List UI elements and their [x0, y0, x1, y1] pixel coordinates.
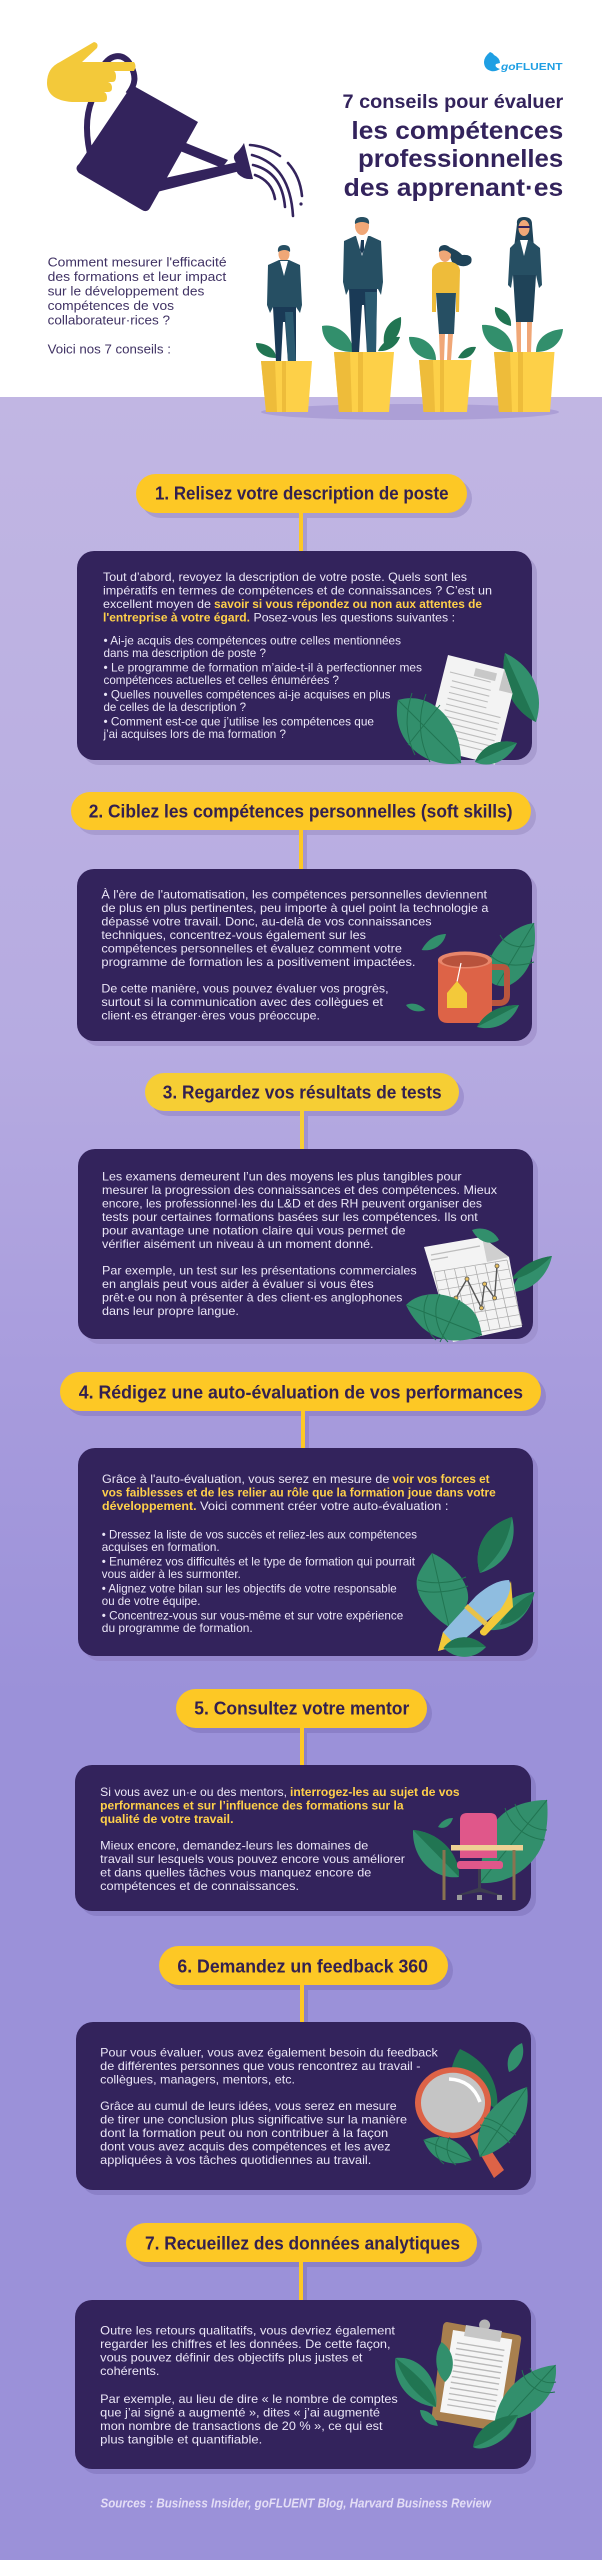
intro text: sur le développement des [48, 284, 205, 298]
step 4 [60, 1372, 546, 1661]
text card: encore, les professionnel·les du L&D et des RH peuvent organiser des [102, 1196, 482, 1210]
pots [261, 352, 554, 412]
text card: et dans quelles tâches vous manquez encore de [100, 1866, 372, 1880]
text card: • Quelles nouvelles compétences ai-je acquises en plus [104, 688, 390, 702]
text card: Mieux encore, demandez-leurs les domaines de [100, 1838, 369, 1852]
text card: dont la formation peut ou non contribuer à la façon [100, 2126, 388, 2140]
intro text: compétences de vos [48, 298, 175, 313]
text card: vous pouvez définir des objectifs plus justes et [100, 2350, 363, 2364]
text card: • Comment est-ce que j’utilise les compétences que [104, 714, 374, 728]
text card: plus tangible et quantifiable. [100, 2432, 262, 2446]
heading pill: 6. Demandez un feedback 360 [177, 1956, 428, 1976]
text card: mon nombre de transactions de 20 % », ce qui est [100, 2419, 383, 2433]
heading pill: 7. Recueillez des données analytiques [145, 2232, 460, 2254]
text card: impératifs en termes de compétences et de connaissances ? C’est un [103, 584, 492, 598]
text card: compétences actuelles et celles énumérées ? [104, 673, 339, 687]
text card: compétences et de connaissances. [100, 1879, 299, 1893]
text card: De cette manière, vous pouvez évaluer vos progrès, [101, 982, 389, 996]
heading pill [145, 1073, 464, 1116]
title: professionnelles [358, 145, 563, 173]
logo: goFLUENT [484, 52, 563, 73]
text card: ou de votre équipe. [102, 1594, 200, 1608]
connector [300, 1111, 308, 1149]
heading pill [60, 1372, 546, 1416]
intro text: Comment mesurer l'efficacité [48, 254, 227, 270]
text card: de celles de la description ? [104, 700, 246, 714]
text card: dépassé votre travail. Donc, au-delà de vos connaissances [101, 914, 432, 928]
heading pill [136, 474, 472, 518]
text card: appliquées à vos tâches quotidiennes au travail. [100, 2153, 371, 2167]
text card: Outre les retours qualitatifs, vous devriez également [100, 2324, 396, 2338]
text card: • Alignez votre bilan sur les objectifs de votre responsable [102, 1582, 397, 1596]
text card [78, 1448, 538, 1661]
text card: voir vos forces et [392, 1472, 490, 1486]
text card [78, 1149, 538, 1344]
text card: Les examens demeurent l’un des moyens les plus tangibles pour [102, 1170, 462, 1184]
text card: programme de formation les a positivement impactées. [101, 955, 416, 969]
text card: cohérents. [100, 2364, 159, 2378]
text card: du programme de formation. [102, 1621, 253, 1635]
intro text: des formations et leur impact [48, 269, 227, 284]
text card: Par exemple, au lieu de dire « le nombre de comptes [100, 2392, 398, 2406]
text card: compétences personnelles et évaluez comment votre [101, 942, 402, 956]
connector [299, 2262, 307, 2300]
icon: clipboard with leaves [395, 2320, 556, 2448]
text card: • Le programme de formation m’aide-t-il à perfectionner mes [104, 660, 422, 674]
text card: • Ai-je acquis des compétences outre celles mentionnées [104, 634, 401, 648]
icon: document with leaves [397, 653, 539, 765]
text card: savoir si vous répondez ou non aux attentes de [214, 597, 482, 611]
heading pill: 1. Relisez votre description de poste [155, 482, 448, 504]
text card: mesurer la progression des connaissances et des compétences. Mieux [102, 1183, 497, 1197]
logo: goFLUENT: goFLUENT [500, 61, 563, 73]
person 3 [432, 245, 472, 360]
text card: en anglais peut vous aider à évaluer si vous êtes [102, 1277, 374, 1291]
connector [301, 1411, 309, 1448]
text card: techniques, concentrez-vous également sur les [101, 928, 366, 942]
text card [75, 2300, 536, 2474]
text card: dans leur propre langue. [102, 1304, 239, 1318]
connector [300, 1985, 308, 2022]
text card: dans ma description de poste ? [104, 646, 266, 660]
heading pill: 4. Rédigez une auto-évaluation de vos performances [79, 1382, 523, 1402]
text card: prêt·e ou non à présenter à des client·es anglophones [102, 1290, 402, 1304]
text card: Par exemple, un test sur les présentations commerciales [102, 1264, 417, 1278]
text card: • Enumérez vos difficultés et le type de formation qui pourrait [102, 1554, 416, 1568]
connector [299, 830, 307, 869]
heading pill: 5. Consultez votre mentor [194, 1698, 409, 1718]
text card: Grâce à l'auto-évaluation, vous serez en mesure de [102, 1472, 390, 1486]
text card: dont vous avez acquis des compétences et les avez [100, 2140, 390, 2154]
text card: client·es étranger·ères vous préoccupe. [101, 1008, 320, 1022]
text card: qualité de votre travail. [100, 1812, 234, 1826]
text card: interrogez-les au sujet de vos [290, 1785, 460, 1799]
text card: vous aider à les surmonter. [102, 1567, 241, 1581]
heading pill [159, 1946, 453, 1990]
text card [75, 1765, 536, 1916]
heading pill [176, 1689, 432, 1733]
text card: de différentes personnes que vous rencontrez au travail - [100, 2059, 420, 2073]
text card: acquises en formation. [102, 1540, 220, 1554]
illustration: four professionals growing on plant pots [256, 217, 563, 420]
icon: magnifying glass with leaves [415, 2043, 528, 2178]
icon: chart document with leaves [406, 1228, 552, 1342]
connector [299, 513, 307, 551]
person 4 [508, 217, 542, 353]
connector [300, 1728, 307, 1765]
heading pill [126, 2223, 482, 2267]
step 3 [78, 1073, 552, 1344]
text card: Voici comment créer votre auto-évaluation : [200, 1499, 448, 1513]
step 1 [77, 474, 539, 765]
title: les compétences [351, 117, 563, 145]
text card: Posez-vous les questions suivantes : [254, 610, 455, 624]
text card: Pour vous évaluer, vous avez également besoin du feedback [100, 2046, 439, 2060]
heading pill: 2. Ciblez les compétences personnelles (soft skills) [89, 800, 513, 822]
plant leaves [256, 307, 563, 360]
text card: surtout si la communication avec des collègues et [101, 995, 384, 1009]
text card: collègues, managers, mentors, etc. [100, 2072, 295, 2086]
step 6 [76, 1946, 536, 2195]
step 7 [75, 2223, 556, 2474]
intro text [48, 254, 227, 356]
text card: regarder les chiffres et les données. De cette façon, [100, 2337, 390, 2351]
text card: j’ai acquises lors de ma formation ? [103, 727, 286, 741]
icon: pink chair and desk with leaves [413, 1800, 548, 1900]
step 2 [71, 792, 537, 1046]
intro text: collaborateur·rices ? [48, 312, 170, 328]
text card: tests pour certaines formations basées sur les compétences. Ils ont [102, 1210, 478, 1224]
text card: vos faiblesses et de les relier au rôle que la formation joue dans votre [102, 1486, 496, 1500]
title: 7 conseils pour évaluer [342, 91, 564, 113]
text card [77, 869, 537, 1046]
text card: pour avantage une notation claire qui vous permet de [102, 1224, 406, 1238]
intro text: Voici nos 7 conseils : [48, 342, 171, 356]
text card [76, 2022, 536, 2195]
text card: Tout d’abord, revoyez la description de votre poste. Quels sont les [103, 570, 467, 584]
text card: l'entreprise à votre égard. [103, 610, 250, 624]
text card: développement. [102, 1499, 197, 1513]
icon: pen with leaves [417, 1517, 534, 1657]
text card: À l'ère de l'automatisation, les compétences personnelles deviennent [101, 886, 488, 902]
text card: • Dressez la liste de vos succès et reliez-les aux compétences [102, 1528, 417, 1542]
sources: Sources : Business Insider, goFLUENT Blog, Harvard Business Review [100, 2496, 492, 2510]
text card: excellent moyen de [103, 597, 211, 611]
text card: vérifier aisément un niveau à un moment donné. [102, 1237, 374, 1251]
title: des apprenant·es [344, 174, 563, 202]
heading pill: 3. Regardez vos résultats de tests [163, 1082, 442, 1102]
text card: de plus en plus pertinentes, peu importe à quel point la technologie a [101, 901, 489, 915]
text card: Grâce au cumul de leurs idées, vous serez en mesure [100, 2099, 397, 2113]
step 5 [75, 1689, 548, 1916]
text card: de tirer une conclusion plus significative sur la manière [100, 2112, 407, 2126]
text card: que j’ai signé a augmenté », dites « j’ai augmenté [100, 2406, 380, 2420]
person 2 [343, 217, 383, 353]
person 1 [267, 245, 302, 362]
icon: watering can held by a hand [47, 42, 303, 216]
text card: Si vous avez un·e ou des mentors, [100, 1785, 287, 1799]
text card: travail sur lesquels vous pouvez encore vous améliorer [100, 1852, 405, 1866]
heading pill [71, 792, 536, 835]
text card: • Concentrez-vous sur vous-même et sur votre expérience [102, 1608, 404, 1622]
icon: red mug with tea bag and leaves [406, 923, 535, 1028]
title [342, 91, 564, 202]
text card: performances et sur l’influence des formations sur la [100, 1798, 404, 1812]
text card [77, 551, 537, 765]
